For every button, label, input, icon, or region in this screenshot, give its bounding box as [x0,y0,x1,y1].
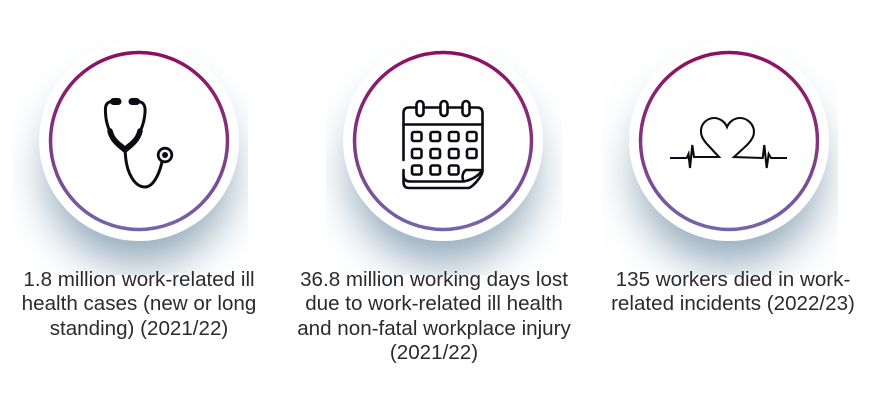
text: working days lost: (2021/22) [390,341,478,364]
text: ill health cases [22,268,256,340]
panel: working days lost badge [343,41,543,264]
text: working days lost: and non-fatal workplace injury [297,317,571,340]
text: ill health cases: 1.8 million work-related ill [23,268,255,290]
graphic: circles and icons [18,50,838,275]
panel: ill health cases badge [39,41,239,264]
text: ill health cases: health cases (new or long [22,292,256,315]
icon: calendar [404,101,482,188]
text: working days lost: due to work-related ill health [305,292,563,315]
text: working days lost: 36.8 million working days lost [300,268,568,290]
icon: heartbeat heart [670,118,787,168]
text: worker deaths: related incidents (2022/23) [611,292,855,315]
panel: worker deaths badge [629,41,829,264]
icon: stethoscope [105,102,172,187]
text: worker deaths [611,268,855,315]
text: working days lost [297,268,571,364]
text: ill health cases: standing) (2021/22) [50,317,228,340]
text: worker deaths: 135 workers died in work- [616,268,850,290]
